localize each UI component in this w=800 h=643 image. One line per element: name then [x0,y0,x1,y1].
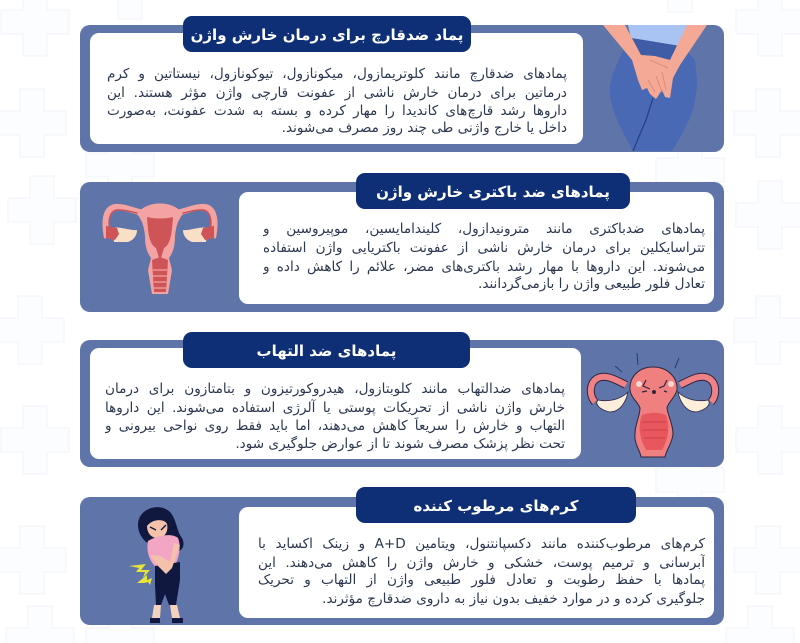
paragraph line 3: پمادها با حفظ رطوبت و تعادل فلور طبیعی واژن از التهاب و تحریک [258,572,705,588]
heading: پماد ضدقارچ برای درمان خارش واژن [191,26,463,44]
paragraph line 1: پمادهای ضدقارچ مانند کلوتریمازول، میکونازول، تیوکونازول، نیستاتین و کرم [107,66,567,82]
illustration: sad uterus [586,353,720,458]
heading: کرم‌های مرطوب کننده [414,497,578,515]
paragraph line 2: آبرسانی و ترمیم پوست، خشکی و خارش واژن را کاهش می‌دهند. این [258,555,705,571]
paragraph line 1: پمادهای ضدالتهاب مانند کلوبتازول، هیدروکورتیزون و بتامتازون برای درمان [105,381,565,397]
text block [239,192,714,304]
text block [90,33,583,144]
paragraph line 2: تتراسایکلین برای درمان خارش ناشی از عفونت باکتریایی واژن استفاده [263,240,705,256]
heading [183,16,471,52]
paragraph line 4: تعادل فلور طبیعی واژن را بازمی‌گردانند. [478,276,705,292]
heading: پمادهای ضد باکتری خارش واژن [376,183,610,201]
paragraph line 3: التهاب و خارش را سریعاً کاهش می‌دهند، اما باید فقط روی نواحی بیرونی و [105,418,565,434]
heading [183,332,470,368]
paragraph line 1: کرم‌های مرطوب‌کننده مانند دکسپانتنول، ویتامین A+D و زینک اکساید با [258,536,705,552]
panel: antifungal ointments [80,16,724,152]
panel: moisturizing creams [80,487,724,625]
illustration: hands over jeans [603,25,707,152]
paragraph line 1: پمادهای ضدباکتری مانند مترونیدازول، کلیندامایسین، موپیروسین و [263,221,705,237]
text block [239,507,714,618]
heading [356,487,636,523]
heading [356,173,630,209]
illustration: woman in pain [129,507,184,623]
paragraph line 2: خارش واژن ناشی از تحریکات پوستی یا آلرژی استفاده می‌شوند. این داروها [105,400,565,416]
paragraph line 4: جلوگیری کرده و در موارد خفیف بدون نیاز به داروی ضدقارچ مؤثرند. [322,591,705,607]
panel: antibacterial ointments [80,173,724,312]
paragraph line 4: داخل یا خارج واژنی طی چند روز مصرف می‌شوند. [282,120,567,136]
heading: پمادهای ضد التهاب [257,342,396,360]
text block [90,348,581,459]
panel: anti-inflammatory ointments [80,332,724,467]
illustration: uterus [102,204,218,294]
paragraph line 3: می‌شوند. این داروها با مهار رشد باکتری‌های مضر، علائم را کاهش داده و [263,259,705,275]
paragraph line 3: داروها رشد قارچ‌های کاندیدا را مهار کرده و بسته به شدت عفونت، به‌صورت [107,103,567,119]
paragraph line 2: درماتین برای درمان خارش ناشی از عفونت قارچی واژن مؤثر هستند. این [107,85,567,101]
paragraph line 4: تحت نظر پزشک مصرف شوند تا از عوارض جلوگیری شود. [235,436,565,452]
